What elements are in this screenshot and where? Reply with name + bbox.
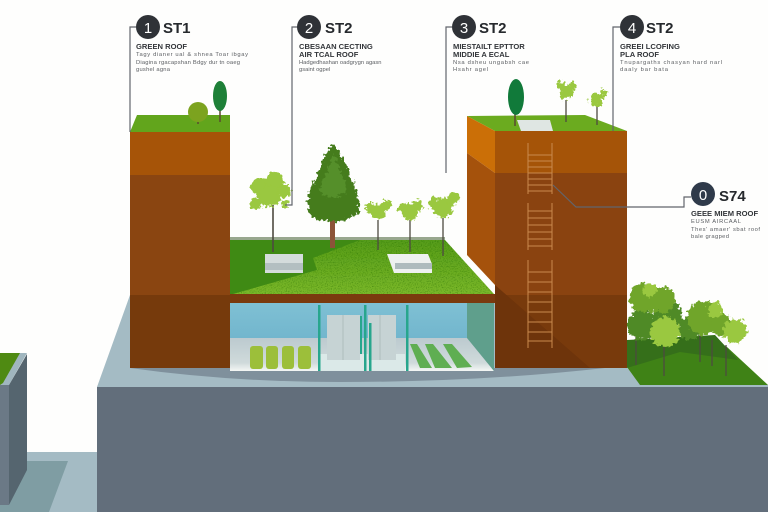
callout 1: Diagina rgacapshan Bdgy dur tn oaeg bbox=[136, 60, 240, 66]
callout 4: 4 bbox=[628, 20, 636, 37]
tree: sapling 2 bbox=[366, 200, 391, 250]
tree: conifer bbox=[308, 144, 359, 248]
callout 3 bbox=[446, 15, 529, 173]
callout 4 bbox=[613, 15, 722, 131]
courtyard trees bbox=[250, 144, 459, 256]
callout 3: Nsa dsheu ungabsh cae bbox=[453, 60, 529, 66]
callout 2 bbox=[285, 15, 382, 205]
planting beds left bbox=[250, 346, 311, 369]
callout 2: gsaint ogpel bbox=[299, 67, 330, 73]
planter right bbox=[387, 254, 432, 273]
left block bbox=[130, 81, 230, 368]
callout 0: GEEE MIEM ROOF bbox=[691, 209, 758, 218]
callout 3: MIDDIE A ECAL bbox=[453, 50, 510, 59]
lawn with trees at right bbox=[627, 283, 768, 385]
callout 4: PLA ROOF bbox=[620, 50, 659, 59]
roof sapling 2 bbox=[589, 89, 608, 125]
callout 2: Hadgedhashan oadgrygn agasn bbox=[299, 60, 382, 66]
garden courtyard bbox=[230, 237, 494, 294]
callout 1: gushel agna bbox=[136, 67, 171, 73]
roof hatch bbox=[517, 120, 553, 131]
callout 0: bale gragped bbox=[691, 234, 729, 240]
doors bbox=[327, 315, 396, 360]
callout 1: ST1 bbox=[163, 20, 191, 37]
glass posts bbox=[318, 305, 408, 371]
roof sapling 1 bbox=[557, 81, 576, 122]
callout 0: 0 bbox=[699, 187, 707, 204]
underground room bbox=[230, 294, 495, 371]
small building at left bbox=[0, 353, 97, 512]
callout 4: Tnupargaths chasyan hard narl bbox=[620, 60, 722, 66]
callout 2: AIR TCAL ROOF bbox=[299, 50, 359, 59]
callout 3: Hsahr agel bbox=[453, 67, 488, 73]
cypress bbox=[213, 81, 227, 122]
callout 2: 2 bbox=[305, 20, 313, 37]
callout 2: ST2 bbox=[325, 20, 353, 37]
callout 1: GREEN ROOF bbox=[136, 42, 187, 51]
callout 0: Thes' amaer' sbat roof bbox=[691, 227, 760, 233]
callout 0: S74 bbox=[719, 188, 746, 205]
callout 4: ST2 bbox=[646, 20, 674, 37]
ladder bbox=[528, 143, 552, 348]
callout 2: CBESAAN CECTING bbox=[299, 42, 373, 51]
tree: sapling 4 bbox=[428, 192, 459, 256]
tree: sapling 3 bbox=[398, 200, 423, 252]
shrub bbox=[188, 102, 208, 124]
callout 0 bbox=[553, 182, 760, 240]
roof cypress bbox=[508, 79, 524, 126]
planting beds right bbox=[410, 344, 472, 368]
callout 1: 1 bbox=[144, 20, 152, 37]
callout 3: ST2 bbox=[479, 20, 507, 37]
callout 3: MIESTAILT EPTTOR bbox=[453, 42, 525, 51]
tree: left sapling bbox=[250, 172, 291, 252]
callout 1 bbox=[130, 15, 248, 132]
planter left bbox=[265, 254, 303, 273]
callout 0: EUSM AIRCAAL bbox=[691, 219, 742, 225]
callout 1: Tagy dianer ual & shnea Toar ibgay bbox=[136, 52, 248, 58]
callout 4: GREEI LCOFING bbox=[620, 42, 680, 51]
callout 4: daaly bar bata bbox=[620, 67, 669, 73]
callout 3: 3 bbox=[460, 20, 468, 37]
ground slab bbox=[97, 295, 768, 512]
right block bbox=[467, 79, 627, 368]
